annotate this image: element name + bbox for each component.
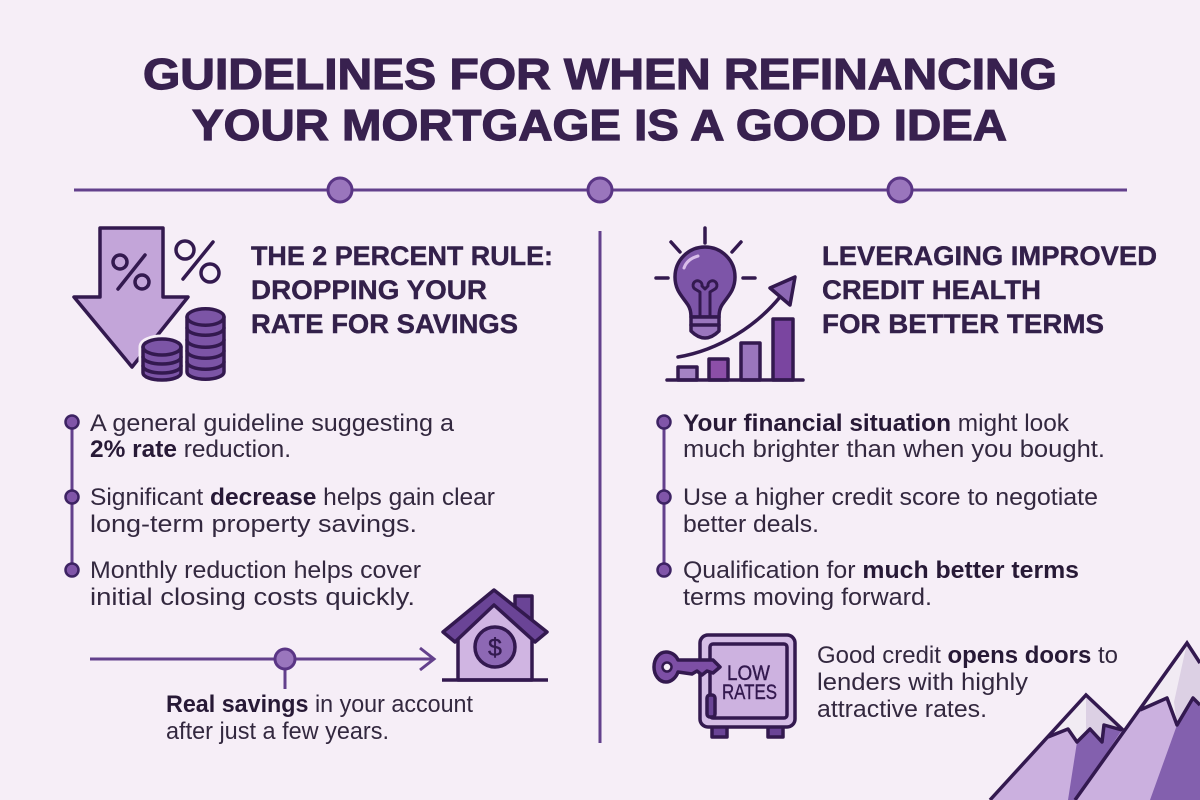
right timeline markers: [658, 416, 670, 576]
arrow with midpoint marker: [90, 648, 434, 689]
heading: credit health: [822, 241, 1157, 339]
icon: house with dollar: [442, 590, 548, 680]
heading: credit health: CREDIT HEALTH: [822, 275, 1041, 305]
icon: down arrow with percent signs and coins: [74, 228, 224, 380]
icon: key and safe with low rates: RATES: [722, 681, 777, 704]
icon: key and safe with low rates: [654, 635, 795, 737]
title: YOUR MORTGAGE IS A GOOD IDEA: [192, 101, 1007, 150]
heading: 2 percent rule: RATE FOR SAVINGS: [251, 309, 518, 339]
title: GUIDELINES FOR WHEN REFINANCING: [143, 50, 1057, 99]
right bullet list: Use a higher credit score to negotiate: [683, 484, 1098, 511]
savings caption: Real savings in your account: [166, 691, 473, 718]
savings caption: [166, 691, 473, 745]
heading: credit health: LEVERAGING IMPROVED: [822, 241, 1157, 271]
left bullet list: A general guideline suggesting a: [90, 410, 455, 437]
left bullet list: initial closing costs quickly.: [90, 584, 415, 611]
title: [143, 50, 1057, 150]
savings caption: after just a few years.: [166, 718, 389, 745]
top divider with three nodes: [74, 178, 1127, 202]
left bullet list: 2% rate reduction.: [90, 436, 291, 463]
credit caption: Good credit opens doors to: [817, 642, 1118, 669]
center vertical divider: [598, 231, 602, 743]
right bullet list: Qualification for much better terms: [683, 557, 1079, 584]
heading: 2 percent rule: [251, 241, 553, 339]
credit caption: attractive rates.: [817, 696, 987, 723]
icon: key and safe with low rates: LOW: [727, 662, 770, 685]
left bullet list: long-term property savings.: [90, 511, 417, 538]
right bullet list: [683, 410, 1105, 611]
credit caption: [817, 642, 1118, 723]
left bullet list: [90, 410, 495, 611]
right bullet list: terms moving forward.: [683, 584, 932, 611]
icon: lightbulb with growth chart: [656, 228, 803, 380]
right bullet list: better deals.: [683, 511, 819, 538]
right bullet list: much brighter than when you bought.: [683, 436, 1105, 463]
heading: credit health: FOR BETTER TERMS: [822, 309, 1104, 339]
heading: 2 percent rule: THE 2 PERCENT RULE:: [251, 241, 553, 271]
credit caption: lenders with highly: [817, 669, 1028, 696]
left timeline markers: [66, 416, 78, 576]
icon: mountains: [990, 643, 1200, 800]
left bullet list: Significant decrease helps gain clear: [90, 484, 495, 511]
heading: 2 percent rule: DROPPING YOUR: [251, 275, 487, 305]
right bullet list: Your financial situation might look: [683, 410, 1070, 437]
icon: house with dollar: $: [488, 634, 502, 662]
left bullet list: Monthly reduction helps cover: [90, 557, 421, 584]
